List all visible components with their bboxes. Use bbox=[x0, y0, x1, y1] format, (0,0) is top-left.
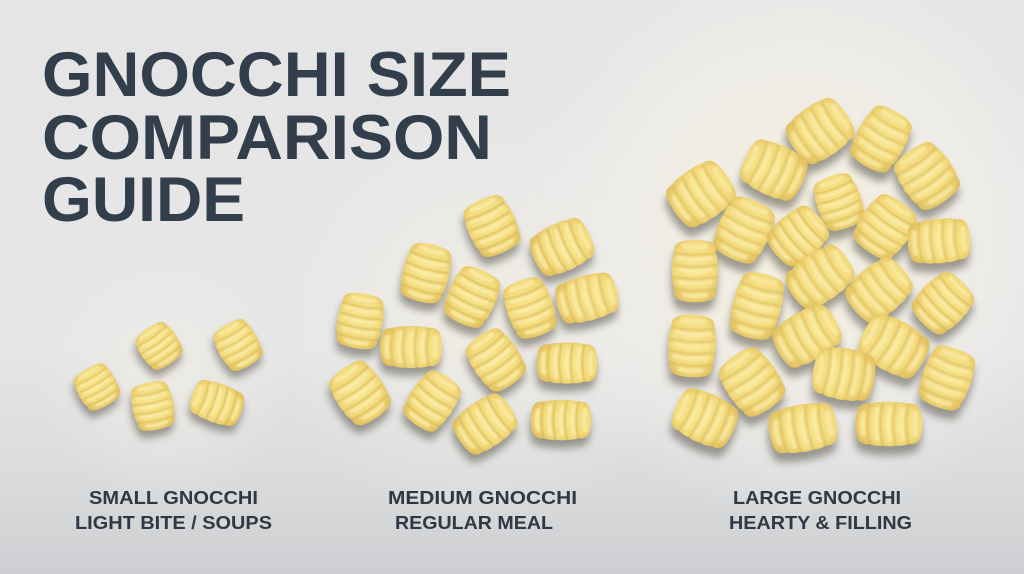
gnocchi piece bbox=[906, 216, 972, 266]
label: medium gnocchi: MEDIUM GNOCCHI bbox=[388, 487, 577, 508]
label: medium gnocchi: REGULAR MEAL bbox=[395, 512, 553, 533]
gnocchi piece bbox=[660, 154, 742, 234]
gnocchi piece bbox=[847, 188, 923, 266]
gnocchi piece bbox=[438, 261, 506, 333]
gnocchi piece bbox=[712, 341, 792, 423]
gnocchi piece bbox=[531, 400, 591, 440]
gnocchi piece bbox=[707, 191, 781, 269]
gnocchi piece bbox=[498, 273, 562, 343]
title bbox=[42, 40, 511, 235]
gnocchi piece bbox=[725, 268, 789, 344]
contact shadows under all gnocchi bbox=[68, 100, 980, 469]
gnocchi piece bbox=[761, 199, 835, 273]
gnocchi piece bbox=[396, 239, 456, 307]
gnocchi piece bbox=[208, 314, 268, 376]
gnocchi piece bbox=[765, 399, 841, 457]
gnocchi piece bbox=[735, 133, 813, 207]
large gnocchi cluster bbox=[660, 91, 981, 457]
label: small gnocchi: SMALL GNOCCHI bbox=[89, 487, 258, 508]
gnocchi piece bbox=[856, 402, 922, 446]
medium gnocchi cluster bbox=[323, 190, 623, 461]
gnocchi piece bbox=[397, 364, 467, 438]
gnocchi piece bbox=[380, 326, 442, 368]
gnocchi piece bbox=[186, 376, 248, 430]
gnocchi piece bbox=[809, 169, 869, 235]
small gnocchi cluster bbox=[69, 314, 268, 434]
gnocchi piece bbox=[766, 298, 848, 374]
title: COMPARISON bbox=[42, 103, 492, 173]
gnocchi piece bbox=[905, 265, 981, 341]
gnocchi piece bbox=[323, 354, 397, 432]
gnocchi piece bbox=[838, 250, 920, 330]
label: large gnocchi: HEARTY & FILLING bbox=[729, 512, 912, 533]
gnocchi piece bbox=[131, 317, 187, 375]
label: small gnocchi bbox=[75, 487, 272, 533]
gnocchi piece bbox=[887, 135, 967, 217]
gnocchi piece bbox=[333, 290, 387, 352]
gnocchi piece bbox=[69, 359, 125, 415]
gnocchi piece bbox=[852, 307, 936, 385]
title: GUIDE bbox=[42, 165, 245, 235]
gnocchi piece bbox=[779, 91, 861, 171]
gnocchi piece bbox=[913, 341, 981, 415]
label: medium gnocchi bbox=[388, 487, 577, 533]
gnocchi piece bbox=[672, 240, 718, 302]
gnocchi piece bbox=[537, 342, 597, 384]
gnocchi piece bbox=[551, 268, 623, 328]
gnocchi piece bbox=[667, 313, 717, 379]
gnocchi piece bbox=[809, 343, 879, 405]
label: large gnocchi bbox=[729, 487, 912, 533]
label: small gnocchi: LIGHT BITE / SOUPS bbox=[75, 512, 272, 533]
gnocchi piece bbox=[460, 322, 532, 398]
gnocchi piece bbox=[844, 100, 918, 178]
gnocchi piece bbox=[458, 190, 526, 262]
label: large gnocchi: LARGE GNOCCHI bbox=[733, 487, 901, 508]
gnocchi piece bbox=[128, 378, 178, 434]
gnocchi piece bbox=[666, 382, 744, 454]
gnocchi piece bbox=[524, 212, 600, 282]
gnocchi piece bbox=[779, 238, 861, 316]
title: GNOCCHI SIZE bbox=[42, 40, 511, 110]
gnocchi piece bbox=[446, 387, 524, 461]
